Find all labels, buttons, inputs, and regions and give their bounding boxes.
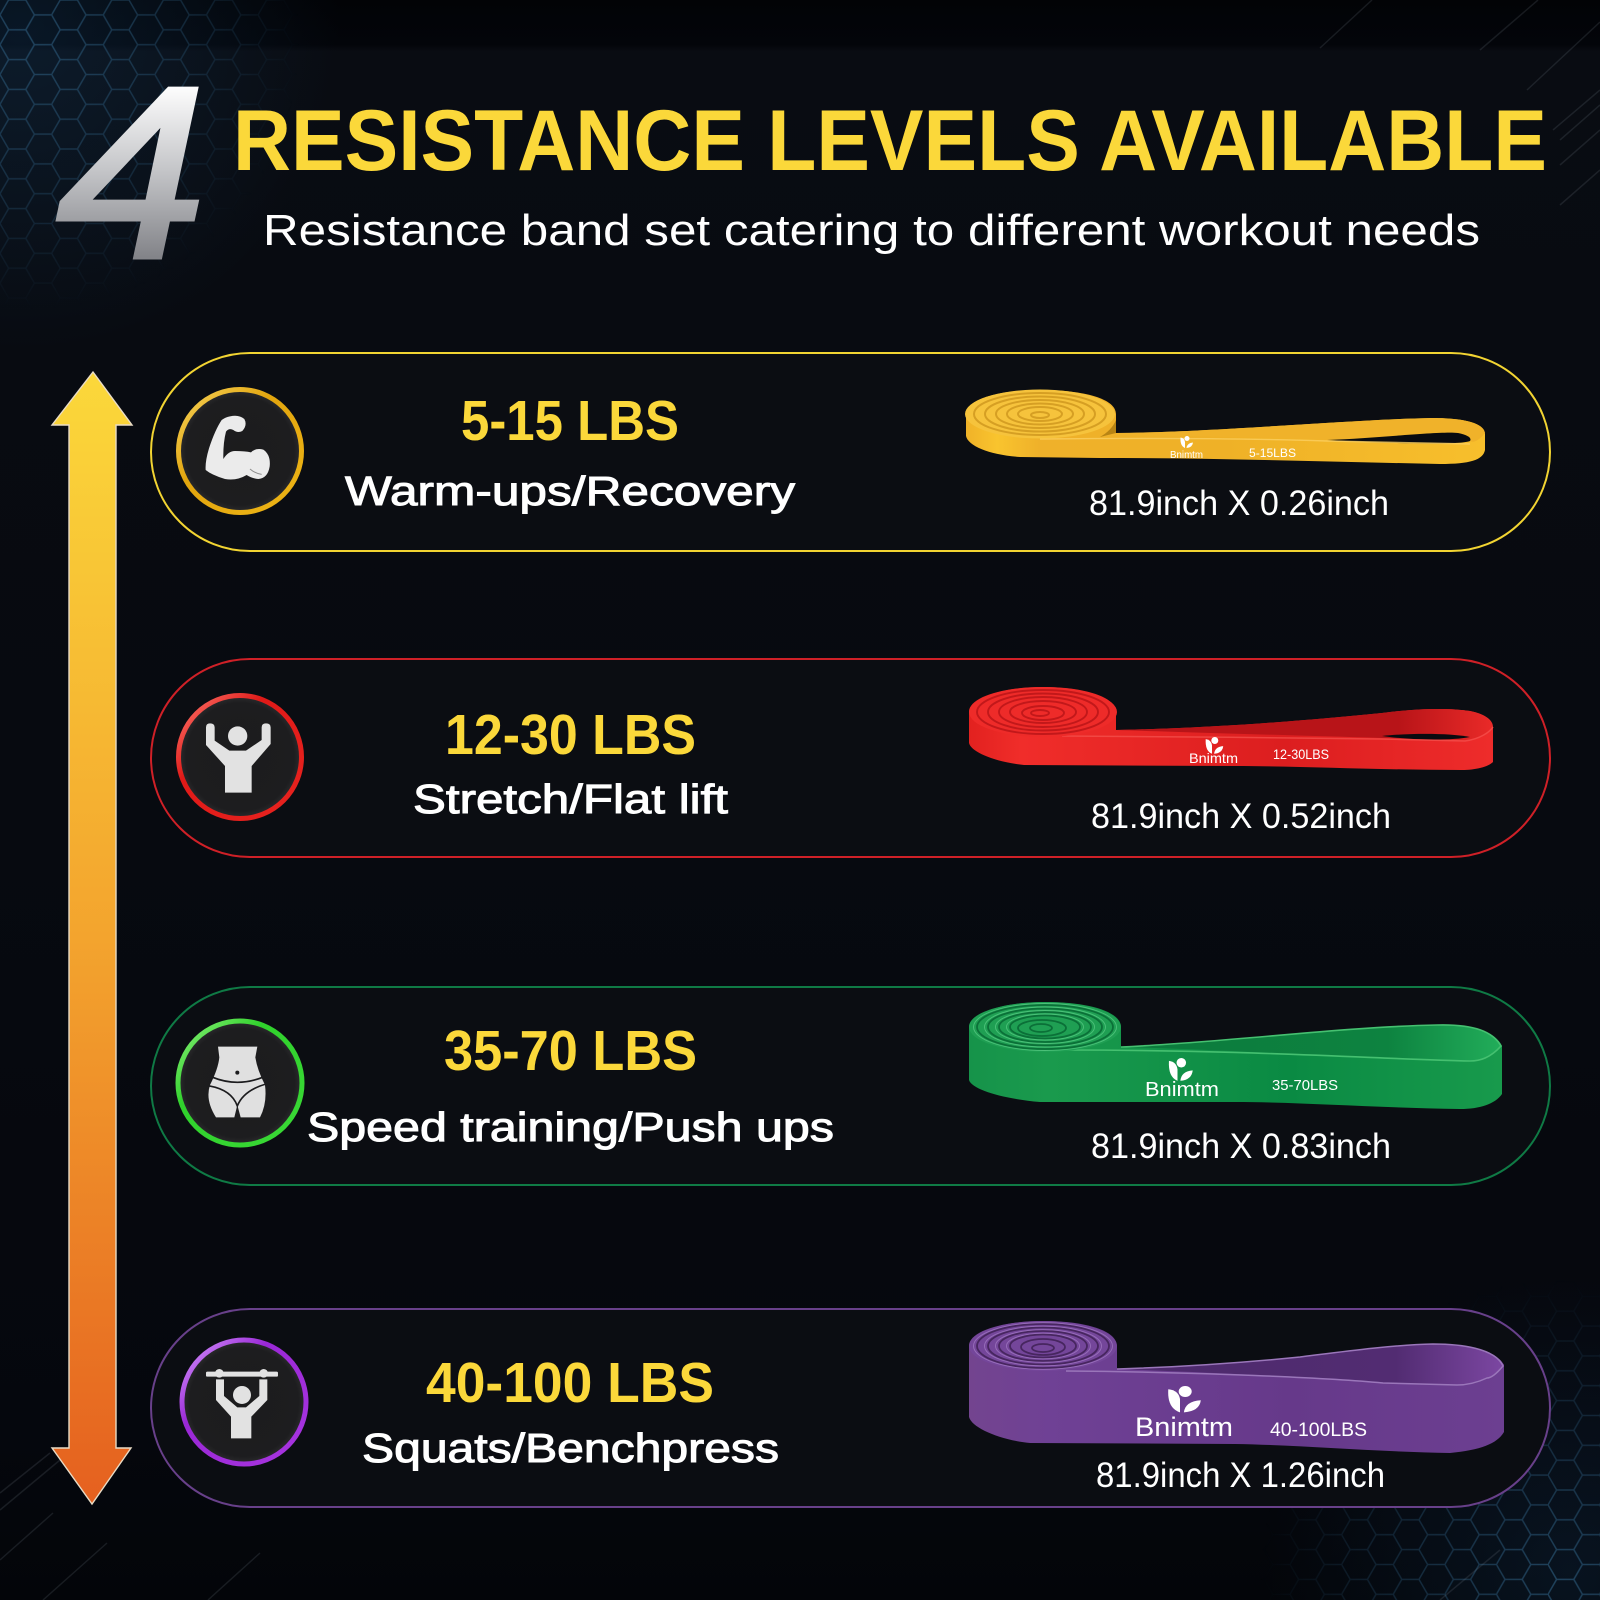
panel: 35-70 LBS — [151, 987, 1550, 1185]
purple band: Bnimtm — [1135, 1412, 1233, 1442]
red band: 12-30LBS — [1273, 747, 1329, 762]
green band: Bnimtm — [1145, 1079, 1219, 1101]
icon: flexed bicep — [178, 390, 302, 512]
weight label: 5-15 LBS — [461, 389, 679, 453]
weight label: 35-70 LBS — [444, 1019, 697, 1083]
yellow band — [965, 390, 1485, 464]
band dimensions: 81.9inch X 0.26inch — [1089, 484, 1389, 523]
weight label: 40-100 LBS — [426, 1351, 714, 1415]
big numeral 4: 4 — [57, 36, 206, 309]
subtitle: Resistance band set catering to different workout needs — [263, 206, 1480, 255]
red band: Bnimtm — [1189, 750, 1238, 766]
use label: Stretch/Flat lift — [413, 776, 729, 822]
title: RESISTANCE LEVELS AVAILABLE — [233, 93, 1547, 189]
icon: pull-up figure — [182, 1340, 306, 1464]
use label: Speed training/Push ups — [307, 1104, 834, 1150]
yellow band: 5-15LBS — [1249, 446, 1296, 460]
purple band: 40-100LBS — [1270, 1420, 1367, 1441]
band dimensions: 81.9inch X 0.52inch — [1091, 797, 1391, 836]
use label: Squats/Benchpress — [362, 1425, 779, 1471]
band dimensions: 81.9inch X 1.26inch — [1096, 1456, 1385, 1495]
panel: 5-15 LBS — [151, 353, 1550, 551]
icon: person arms raised — [178, 696, 302, 818]
use label: Warm-ups/Recovery — [345, 468, 796, 514]
yellow band: Bnimtm — [1170, 449, 1203, 461]
green band: 35-70LBS — [1272, 1077, 1338, 1094]
arrow: resistance scale — [52, 372, 132, 1504]
panel: 12-30 LBS — [151, 659, 1550, 857]
purple band — [969, 1321, 1504, 1453]
band dimensions: 81.9inch X 0.83inch — [1091, 1127, 1391, 1166]
green band — [969, 1002, 1502, 1109]
red band — [969, 687, 1493, 770]
icon: waist and hips — [178, 1021, 302, 1145]
weight label: 12-30 LBS — [445, 703, 696, 767]
panel: 40-100 LBS — [151, 1309, 1550, 1507]
